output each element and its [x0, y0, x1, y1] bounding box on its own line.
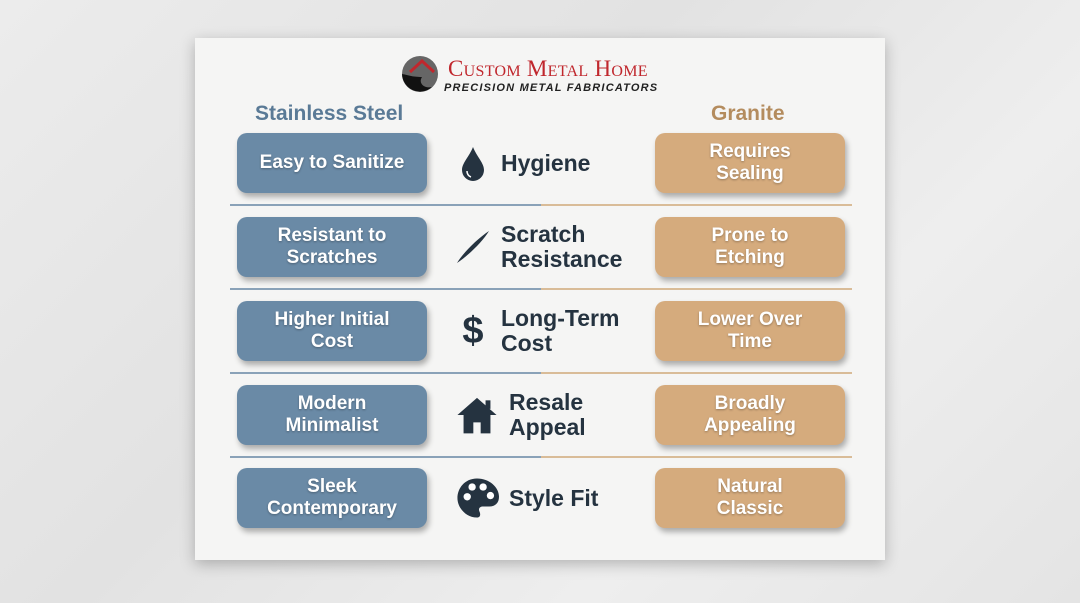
row: cost: Higher Initial [274, 309, 390, 330]
row: cost: Cost [311, 331, 353, 352]
row: style: Sleek [307, 476, 357, 497]
icon: logo [402, 56, 438, 92]
row: scratch [236, 217, 850, 284]
heading: stainless: Stainless Steel [255, 102, 403, 125]
brand name: Custom Metal Home [448, 56, 648, 81]
row: cost [236, 301, 850, 368]
label: cost: Long-Term [501, 305, 619, 331]
row: hygiene: Sealing [716, 163, 784, 184]
label: cost: $ [462, 310, 484, 352]
label: style [457, 478, 598, 518]
label: resale [458, 389, 586, 440]
row: scratch: Resistant to [278, 225, 386, 246]
row: hygiene: Easy to Sanitize [260, 152, 404, 173]
label: cost [462, 305, 619, 356]
row: style: Contemporary [267, 498, 397, 519]
label: style: Style Fit [509, 484, 598, 510]
row: style: Natural [717, 476, 783, 497]
row: cost: Time [728, 331, 772, 352]
label: hygiene: Hygiene [501, 150, 590, 176]
label: scratch: Resistance [501, 246, 622, 272]
row: scratch: Etching [715, 247, 785, 268]
label: resale: Resale [509, 389, 583, 415]
row: hygiene: Requires [709, 141, 791, 162]
row: resale: Appealing [704, 415, 796, 436]
heading: granite: Granite [711, 102, 785, 125]
row: resale: Modern [298, 393, 366, 414]
tagline: PRECISION METAL FABRICATORS [444, 82, 658, 94]
row: resale: Broadly [715, 393, 785, 414]
label: resale: Appeal [509, 414, 586, 440]
label: cost: Cost [501, 330, 552, 356]
row: resale [236, 385, 850, 452]
label: scratch [457, 221, 622, 272]
label: hygiene [462, 147, 590, 181]
row: style: Classic [717, 498, 783, 519]
row: resale: Minimalist [286, 415, 378, 436]
logo [402, 56, 658, 94]
row: cost: Lower Over [698, 309, 802, 330]
row: scratch: Prone to [711, 225, 789, 246]
row: scratch: Scratches [287, 247, 377, 268]
card [195, 38, 885, 560]
row: style [236, 468, 850, 536]
row: hygiene [236, 133, 850, 200]
label: scratch: Scratch [501, 221, 585, 247]
